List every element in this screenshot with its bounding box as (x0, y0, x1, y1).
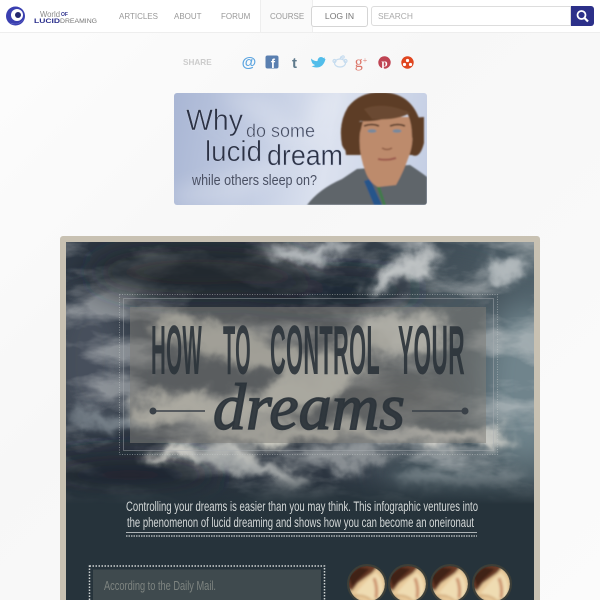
banner advert (174, 93, 427, 205)
banner headline (186, 104, 343, 189)
share icons (242, 54, 414, 72)
icon: stumbleupon (401, 56, 414, 69)
title: how to control your: TO (223, 311, 251, 389)
logo: LUCID (34, 18, 61, 25)
nav: course (260, 0, 313, 32)
icon: pinterest: p (381, 58, 388, 70)
banner headline: Why (186, 104, 243, 137)
ear icon 1 (348, 565, 386, 600)
icon: google plus: g (355, 54, 363, 71)
title: how to control your: HOW (151, 311, 202, 389)
title: how to control your (152, 325, 464, 374)
icon: reddit (333, 56, 347, 67)
banner headline: do some (246, 121, 315, 141)
banner portrait (179, 93, 427, 205)
icon: twitter (311, 57, 326, 68)
intro underline (126, 532, 477, 536)
infographic image (66, 242, 534, 600)
intro text (126, 499, 478, 530)
header bar (0, 0, 600, 33)
logo (6, 6, 97, 26)
search button (571, 6, 594, 26)
banner headline: while others sleep on? (191, 173, 317, 189)
nav: course: COURSE (270, 12, 304, 21)
logo: DREAMING (60, 18, 97, 25)
ear icon 4 (473, 565, 511, 600)
log in button: LOG IN (325, 11, 354, 21)
nav: about: ABOUT (174, 12, 202, 21)
search field: SEARCH (378, 11, 413, 21)
quote box (90, 566, 324, 600)
quote text: According to the Daily Mail. (104, 578, 216, 593)
title: dreams: dreams (213, 371, 405, 444)
sky photograph (66, 242, 534, 600)
icon: email: @ (242, 54, 256, 71)
infographic panel (60, 236, 540, 600)
banner headline: lucid (205, 136, 262, 168)
title plate (120, 294, 498, 454)
ear icon 3 (431, 565, 469, 600)
search field (371, 6, 571, 26)
right ornament (412, 408, 468, 414)
logo: OF (61, 12, 68, 18)
share label: SHARE (183, 58, 212, 67)
log in button (311, 6, 368, 27)
icon: facebook (266, 56, 278, 71)
ear icon rings (348, 565, 511, 600)
icon: facebook: f (271, 57, 276, 71)
logo: World (40, 9, 60, 19)
ear icon 2 (389, 565, 427, 600)
icon: tumblr: t (292, 55, 297, 72)
banner headline: dream (267, 140, 343, 172)
left ornament (150, 408, 205, 414)
nav: forum: FORUM (221, 12, 250, 21)
icon: google plus: + (363, 56, 368, 65)
icon: pinterest (378, 56, 391, 70)
nav: articles: ARTICLES (119, 12, 158, 21)
